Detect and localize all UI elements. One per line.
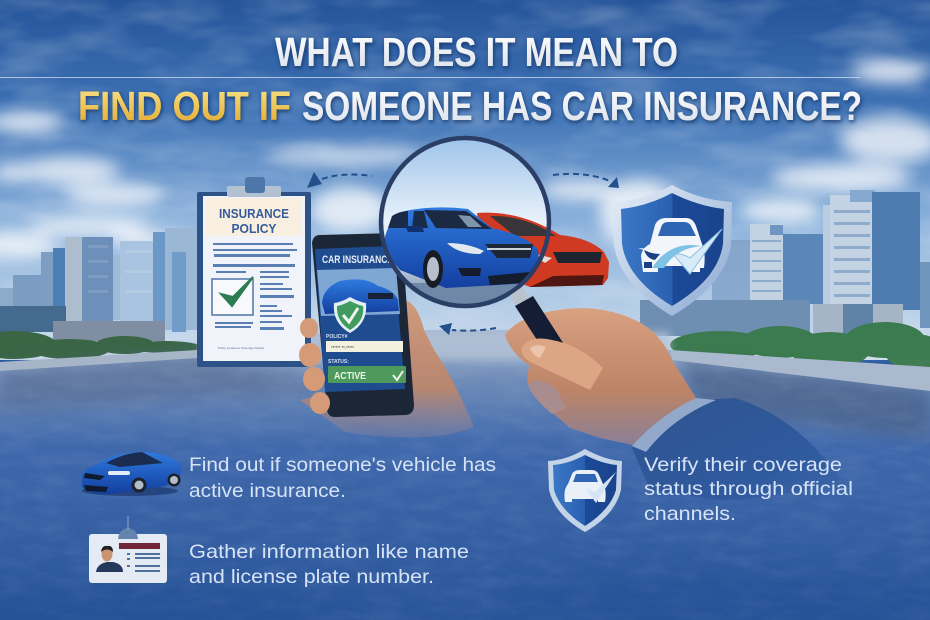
clipboard: insurance policy: POLICY	[232, 222, 277, 236]
city skyline right	[640, 190, 930, 370]
arrow heads	[307, 172, 619, 335]
policy field: POLICY#	[326, 334, 348, 340]
phone heading: CAR INSURANCE	[322, 254, 393, 266]
title line 1: WHAT DOES IT MEAN TO	[275, 29, 678, 75]
title line 2 gold: FIND OUT IF	[78, 83, 291, 129]
icon: blue car	[82, 452, 181, 496]
sky background	[0, 0, 930, 360]
sleeve	[632, 398, 840, 500]
shield emblem	[613, 185, 732, 316]
car on shield	[638, 218, 705, 272]
arrows between items	[322, 174, 610, 331]
text: status through official	[644, 478, 853, 500]
title	[78, 29, 862, 129]
horizontal title rule	[0, 77, 860, 78]
road surface	[0, 330, 930, 620]
icon: id card	[89, 516, 167, 583]
city skyline left	[0, 228, 201, 359]
text: and license plate number.	[189, 566, 434, 588]
phone car	[317, 268, 400, 316]
phone in hand: •••••• ••,•••••	[331, 344, 354, 350]
item: verify	[548, 449, 853, 532]
lens ring	[381, 138, 549, 306]
phone in hand	[299, 233, 474, 437]
clipboard: insurance policy: Policy Insurance Coverage Details	[218, 346, 264, 350]
handle	[515, 296, 567, 360]
red car	[477, 213, 609, 287]
phone in hand: ACTIVE	[334, 371, 366, 382]
text: Find out if someone's vehicle has	[189, 454, 496, 476]
item: information	[89, 516, 469, 588]
thumb	[522, 339, 603, 390]
text: active insurance.	[189, 480, 346, 502]
phone shield	[334, 297, 366, 333]
blue car in lens	[383, 207, 539, 288]
barrier right	[670, 350, 930, 391]
barrier left	[0, 350, 197, 371]
phone in hand: STATUS:	[328, 359, 349, 365]
text: Verify their coverage	[644, 454, 842, 476]
icon: small shield	[548, 449, 622, 532]
text: channels.	[644, 503, 736, 525]
clipboard heading: INSURANCE	[219, 207, 289, 221]
item: vehicle	[82, 452, 496, 502]
ferrule	[509, 287, 530, 307]
right hand holding handle	[505, 296, 696, 445]
left palm	[300, 300, 474, 437]
active badge	[328, 366, 406, 383]
checkbox	[212, 279, 253, 315]
magnifying glass with cars	[380, 138, 609, 313]
text: Gather information like name	[189, 541, 469, 563]
fingers	[299, 318, 330, 414]
clipboard: insurance policy	[197, 177, 311, 367]
check mark on shield	[674, 229, 722, 274]
